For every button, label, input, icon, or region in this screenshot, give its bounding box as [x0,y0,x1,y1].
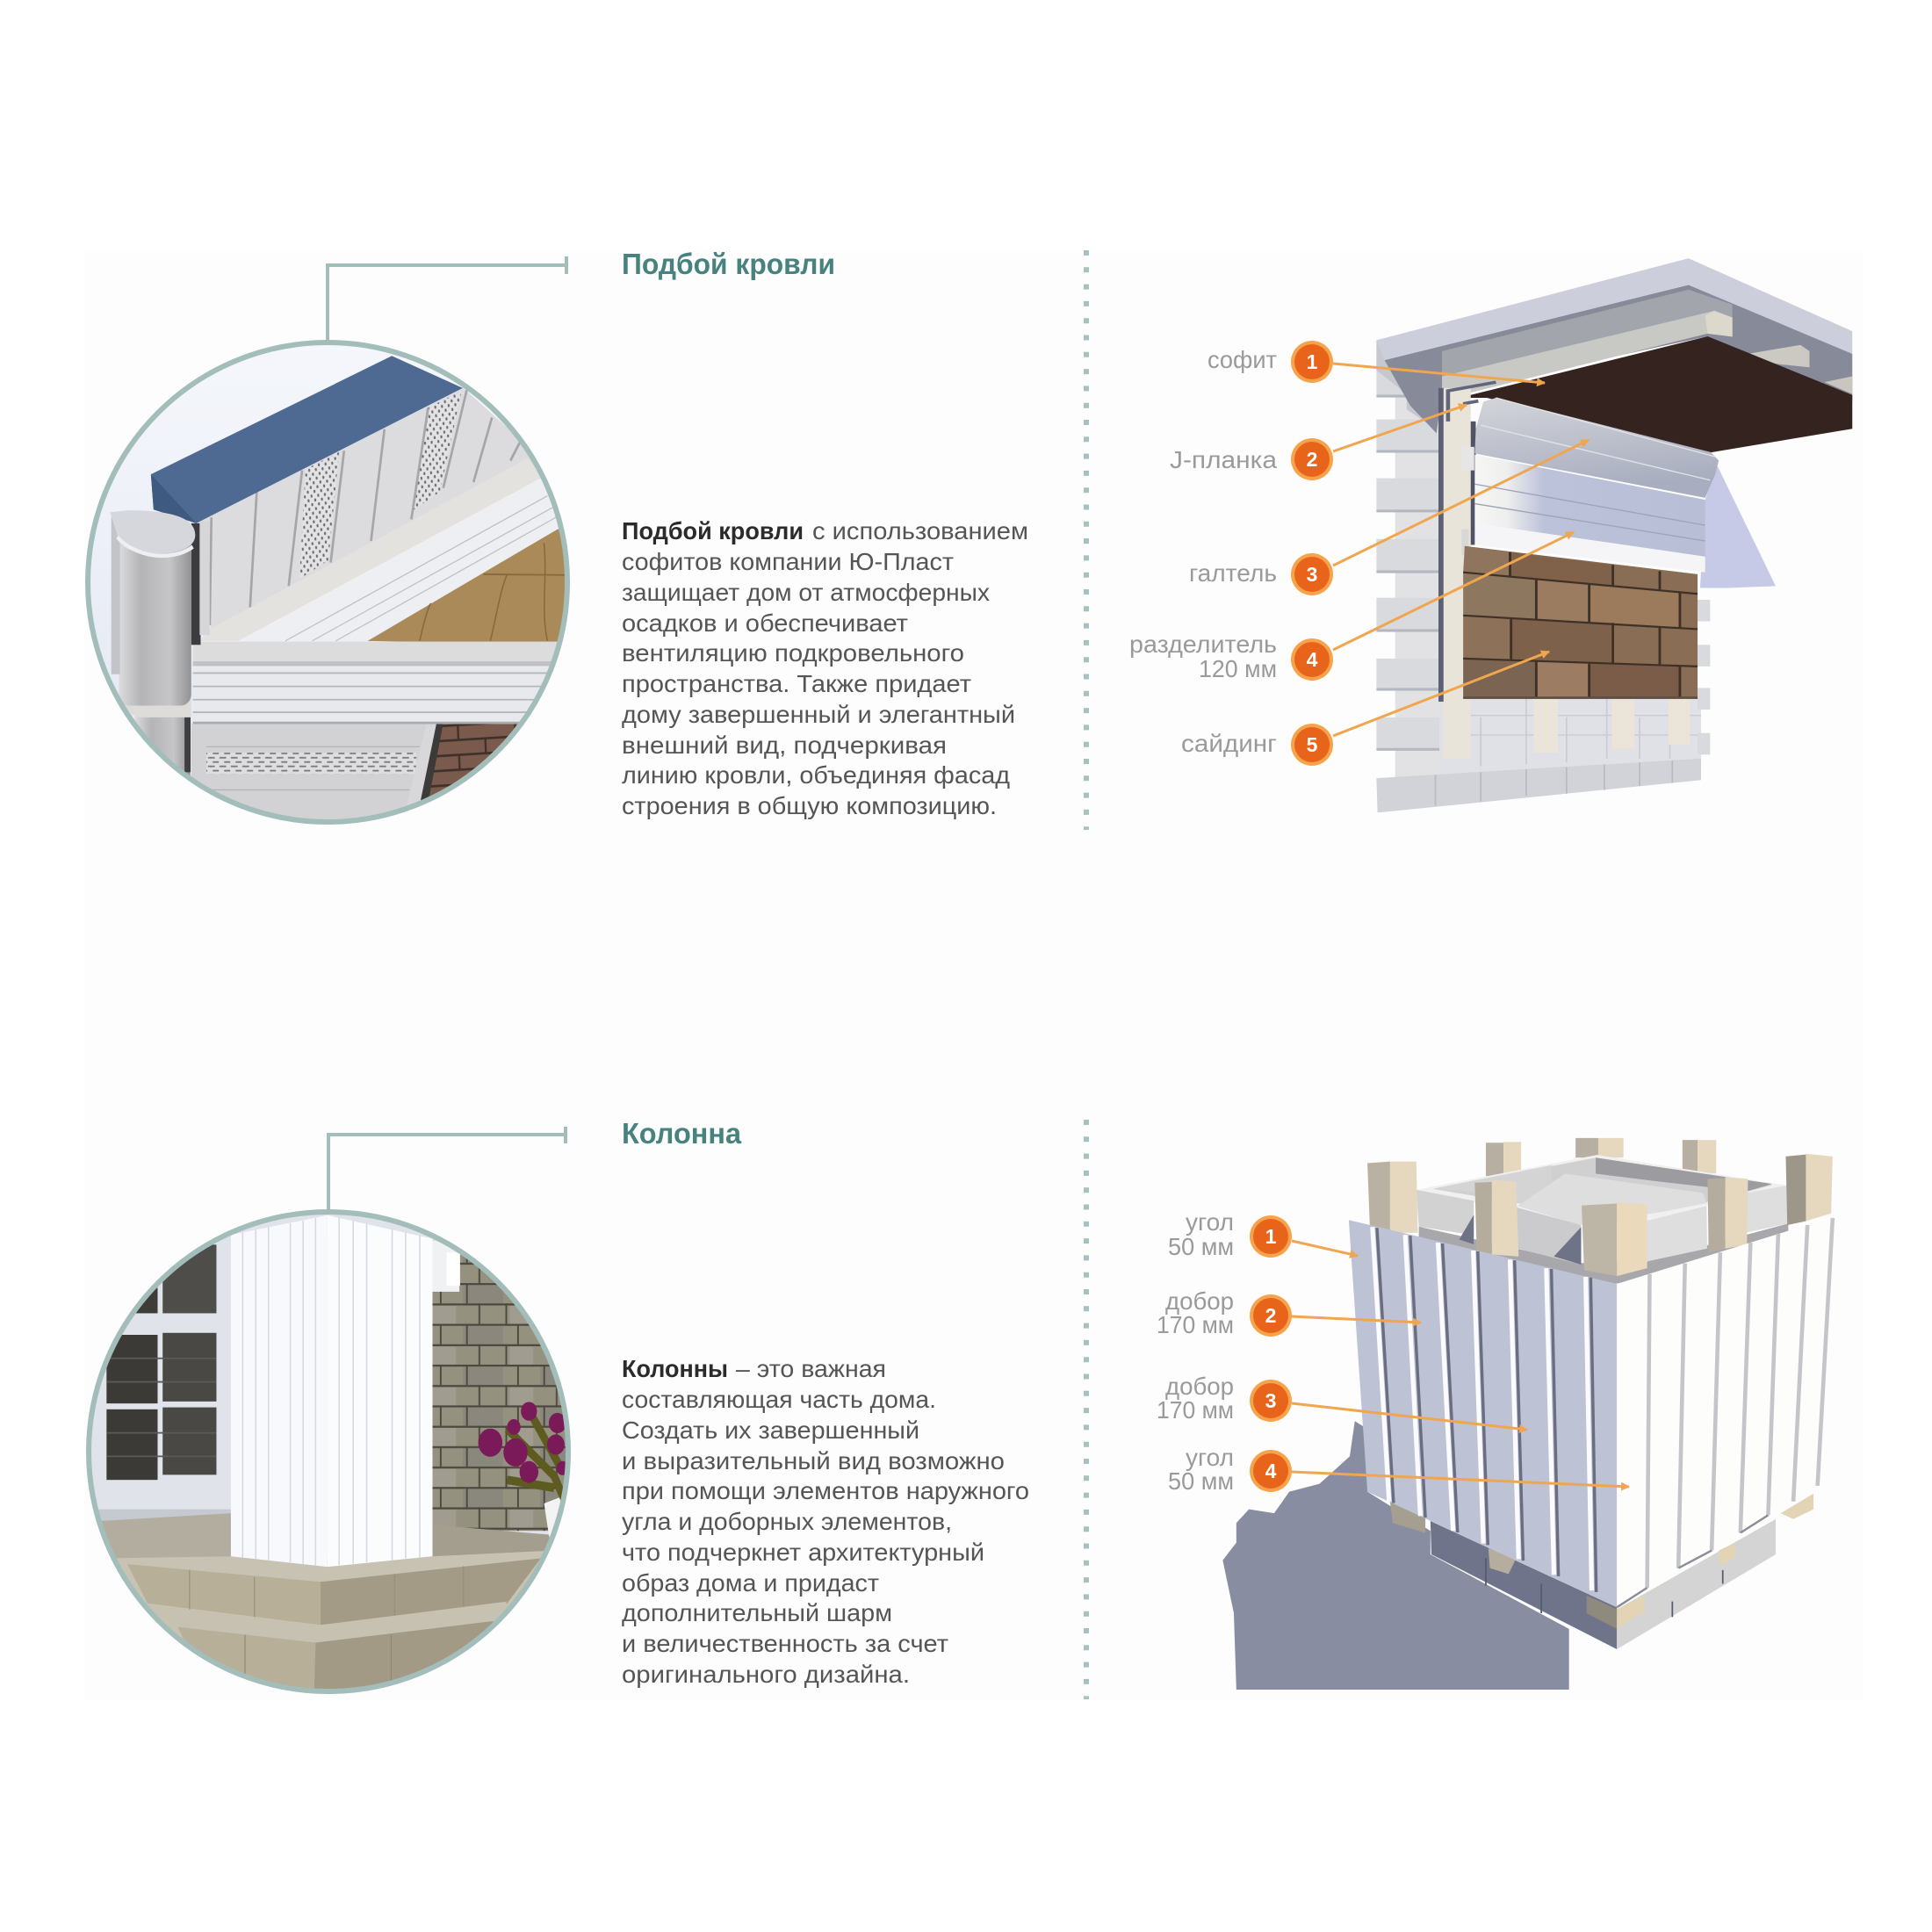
text block: roof soffit description: внешний вид, подчеркивая [622,732,947,759]
text block: column description: при помощи элементов наружного [622,1477,1029,1504]
text block: column description: – это важная [736,1355,886,1382]
callout 1: софит: 1 [1307,350,1318,373]
text block: roof soffit description: софитов компании Ю-Пласт [622,548,954,575]
callout 5: сайдинг [1181,652,1549,766]
text block: column description: и выразительный вид возможно [622,1447,1005,1474]
callout 2: добор 170 мм [1157,1287,1421,1338]
callout 1: угол 50 мм: 50 мм [1168,1233,1234,1260]
back timbers [1486,1138,1716,1176]
stud [1438,388,1690,759]
roof overhang [1376,258,1852,433]
left face panels [1349,1220,1617,1607]
callout 3: добор 170 мм [1157,1373,1527,1430]
callout 4: угол 50 мм: 4 [1265,1460,1277,1482]
callout 2: добор 170 мм: 170 мм [1157,1311,1234,1338]
callout 5: сайдинг: сайдинг [1181,730,1277,757]
text block: column description: угла и доборных элементов, [622,1508,952,1535]
callout 1: угол 50 мм: 1 [1265,1225,1277,1248]
section 1: roof soffit [70,248,1852,864]
callout 3: добор 170 мм: 170 мм [1157,1396,1234,1424]
text block: roof soffit description: Подбой кровли [622,517,804,544]
dotted divider 2 [1084,1120,1089,1699]
dotted divider 1 [1084,250,1089,830]
callout 4: разделитель 120 мм: разделитель [1129,631,1277,658]
text block: column description [622,1355,1029,1688]
text block: roof soffit description: пространства. Также придает [622,670,971,697]
text block: roof soffit description: с использованием [812,517,1028,544]
photo ring [88,342,567,822]
callout 3: галтель [1189,440,1589,595]
soffit panel [1460,336,1852,452]
text block: roof soffit description: осадков и обеспечивает [622,609,908,637]
text block: roof soffit description [622,517,1028,819]
photo: column circle [86,1209,571,1694]
siding panels [1461,398,1719,557]
ground shadow [1222,1421,1569,1690]
masonry wall [1376,371,1710,812]
callout 2: J-планка: J-планка [1170,446,1277,473]
text block: column description: и величественность за счет [622,1630,948,1657]
callout 2: J-планка: 2 [1307,448,1317,471]
callout 1: софит [1208,341,1545,383]
callout 3: добор 170 мм: добор [1165,1373,1234,1400]
page background panel [84,251,1864,1700]
callout 1: софит: софит [1208,346,1277,373]
diagram: column cross-section [1222,1138,1835,1690]
front timbers [1367,1154,1833,1276]
divider strip [1474,523,1705,573]
callout 1: угол 50 мм [1168,1208,1358,1260]
foundation blocks [1431,1519,1776,1649]
soffit shadow [1700,465,1776,588]
text block: column description: Колонны [622,1355,728,1382]
text block: roof soffit description: строения в общую композицию. [622,792,997,819]
text block: roof soffit description: линию кровли, объединяя фасад [622,761,1010,789]
text block: column description: что подчеркнет архитектурный [622,1539,984,1566]
callout 4: разделитель 120 мм [1129,532,1574,682]
callout 4: угол 50 мм [1168,1444,1629,1495]
text block: column description: оригинального дизайна. [622,1661,910,1688]
text block: column description: дополнительный шарм [622,1599,892,1626]
text block: roof soffit description: защищает дом от атмосферных [622,579,990,606]
heading: Подбой кровли: Подбой кровли [622,248,835,280]
callout 5: сайдинг: 5 [1307,733,1318,756]
text block: column description: образ дома и придаст [622,1569,879,1597]
callout 4: разделитель 120 мм: 4 [1307,648,1318,671]
J-channel [1448,382,1496,422]
callout 2: добор 170 мм: добор [1165,1287,1234,1315]
concrete block core [1417,1155,1788,1287]
callout 2: J-планка [1170,405,1467,480]
text block: roof soffit description: дому завершенный и элегантный [622,701,1015,728]
brick siding [1463,546,1698,699]
bottom timber ends [1390,1494,1813,1629]
callout 2: добор 170 мм: 2 [1265,1304,1276,1327]
callout 4: угол 50 мм: угол [1186,1444,1234,1471]
heading: Колонна: Колонна [622,1117,742,1150]
text block: column description: составляющая часть дома. [622,1386,936,1413]
callout 3: галтель: галтель [1189,559,1277,587]
infographic canvas [85,250,1853,1699]
text block: column description: Создать их завершенный [622,1417,919,1444]
callout 4: угол 50 мм: 50 мм [1168,1467,1234,1495]
right face panels [1617,1216,1835,1607]
text block: roof soffit description: вентиляцию подкровельного [622,639,964,667]
callout 3: галтель: 3 [1307,563,1317,586]
photo: roof soffit circle [85,340,570,825]
connector line to heading 1 [328,256,566,344]
diagram: soffit cross-section [1376,258,1852,812]
callout 4: разделитель 120 мм: 120 мм [1199,655,1277,682]
photo ring [89,1212,568,1691]
section 2: column [70,1117,1835,1715]
callout 3: добор 170 мм: 3 [1265,1389,1276,1412]
callout 1: угол 50 мм: угол [1186,1208,1234,1236]
connector line to heading 2 [328,1127,566,1215]
